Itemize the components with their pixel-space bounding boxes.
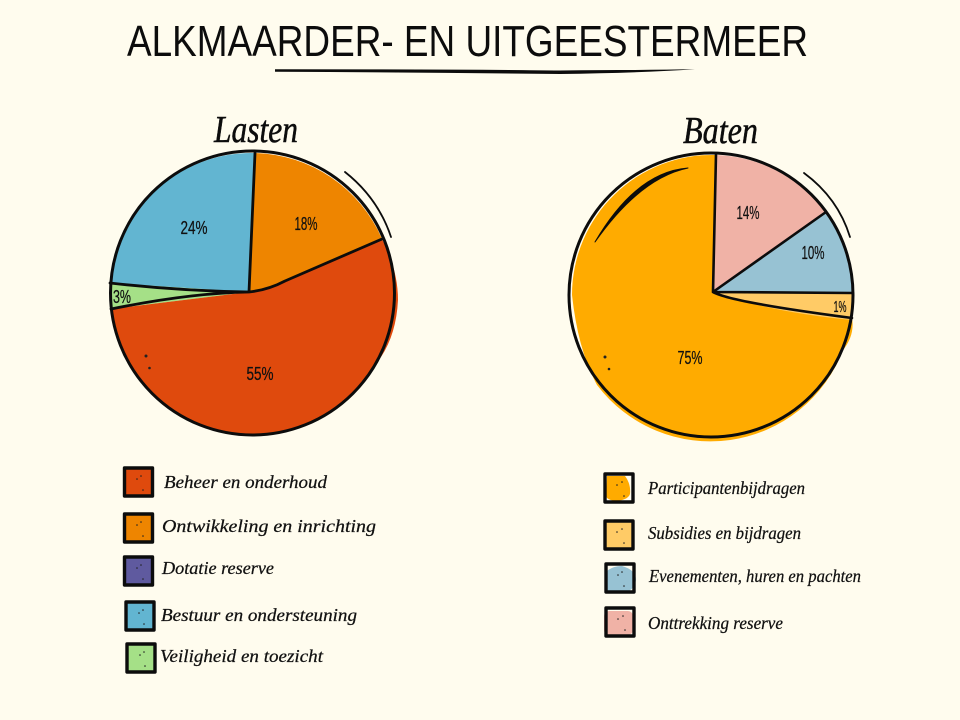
pie outline [569,153,853,437]
highlight arc [345,172,391,237]
value labels: 3% [113,287,131,307]
slice: bestuur en ondersteuning 24% [110,153,255,292]
legend item: ontwikkeling en inrichting: Ontwikkeling en inrichting [162,516,376,536]
slice: ontwikkeling en inrichting 18% [249,153,382,294]
panel: baten [569,110,861,636]
slice: subsidies en bijdragen 1% [713,292,853,320]
slice: evenementen, huren en pachten 10% [713,212,853,293]
legend: baten [604,474,861,636]
value labels: 18% [294,214,318,234]
legend item: subsidies en bijdragen: Subsidies en bijdragen [648,523,801,543]
legend item: onttrekking reserve [604,608,783,636]
legend item: veiligheid en toezicht [127,644,324,672]
slice dividers [713,154,853,318]
slice: ontrekking reserve 14% [713,155,826,292]
heading: lasten: Lasten [213,109,298,151]
legend item: bestuur en ondersteuning: Bestuur en ondersteuning [161,605,357,625]
value labels: 75% [678,348,702,368]
panel: lasten [110,109,398,672]
title underline [275,69,695,74]
legend: lasten [124,468,376,672]
legend item: participantenbijdragen [605,474,805,502]
slice: beheer en onderhoud 55% [111,239,398,436]
legend item: bestuur en ondersteuning [126,602,357,630]
legend item: beheer en onderhoud: Beheer en onderhoud [164,472,328,492]
value labels: 24% [180,218,208,238]
slice: participantenbijdragen 75% [572,155,853,441]
legend item: dotatie reserve [124,557,274,585]
slice dividers [110,153,382,309]
legend item: veiligheid en toezicht: Veiligheid en toezicht [160,646,324,666]
pie outline [110,151,394,435]
slice: veiligheid en toezicht 3% [110,283,249,309]
value labels [113,214,318,384]
title: ALKMAARDER- EN UITGEESTERMEER [127,17,808,66]
legend item: ontwikkeling en inrichting [124,514,376,542]
pie chart: lasten [110,151,398,436]
speckles [144,354,151,369]
value labels: 10% [802,243,824,263]
highlight arcs [804,173,850,237]
legend item: dotatie reserve: Dotatie reserve [161,558,274,578]
heading: baten: Baten [683,110,758,152]
legend item: onttrekking reserve: Onttrekking reserve [648,613,783,633]
value labels: 55% [246,364,274,384]
legend item: participantenbijdragen: Participantenbijdragen [647,478,805,498]
legend item: evenementen, huren en pachten [606,564,861,592]
value labels [678,203,846,368]
legend item: beheer en onderhoud [124,468,328,496]
inner highlight stroke [595,168,688,242]
legend item: subsidies en bijdragen [605,521,801,549]
value labels: 14% [736,203,760,223]
value labels: 1% [834,299,846,316]
pie chart: baten [569,153,853,441]
legend item: evenementen, huren en pachten: Evenementen, huren en pachten [648,566,861,586]
speckles [604,356,610,370]
